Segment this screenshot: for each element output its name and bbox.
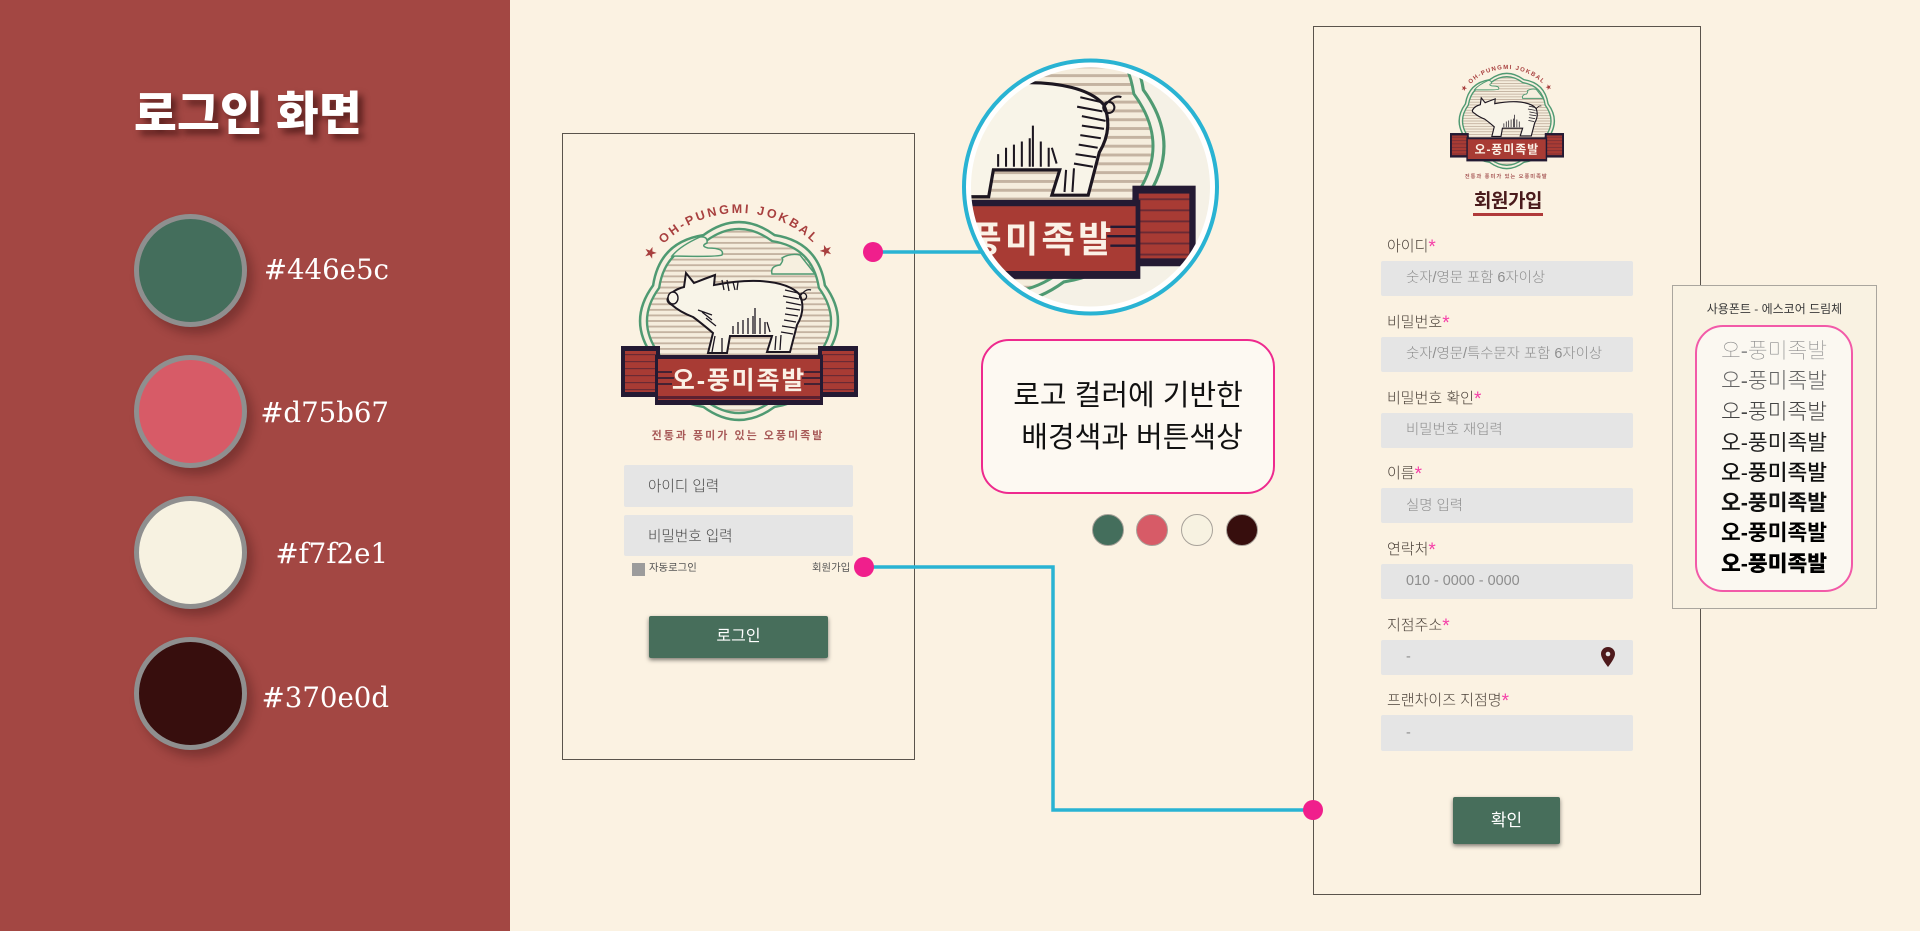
icon: location pin <box>1601 647 1615 667</box>
placeholder: contact: 010 - 0000 - 0000 <box>1406 573 1520 589</box>
mini swatch: pink <box>1136 514 1168 546</box>
colour code: cream: #f7f2e1 <box>275 537 388 570</box>
login input: id: 아이디 입력 <box>648 479 719 495</box>
input: id <box>1381 261 1633 296</box>
panel: sign up mockup <box>1313 26 1701 895</box>
logo: sign up screen: 전통과 풍미가 있는 오풍미족발 <box>1465 172 1548 180</box>
font sample: weight 5: 오-풍미족발 <box>1721 461 1827 485</box>
logo: sign up screen: 오-풍미족발 <box>1475 143 1539 157</box>
callout: logo colour note: 로고 컬러에 기반한 <box>1013 380 1243 412</box>
font sample: weight 2: 오-풍미족발 <box>1721 369 1827 393</box>
label: auto login: 자동로그인 <box>649 563 697 574</box>
placeholder: password confirm: 비밀번호 재입력 <box>1406 422 1503 438</box>
input: branch address <box>1381 640 1633 675</box>
button: confirm: 확인 <box>1491 811 1522 830</box>
form field: password: 비밀번호* <box>1387 313 1450 334</box>
button: login <box>649 616 828 658</box>
panel: colour palette sidebar <box>0 0 510 931</box>
form field: branch address: 지점주소* <box>1387 616 1450 637</box>
swatch: dark brown <box>134 637 247 750</box>
mini swatch: dark brown <box>1226 514 1258 546</box>
placeholder: password: 숫자/영문/특수문자 포함 6자이상 <box>1406 346 1602 362</box>
logo: sign up screen <box>1450 64 1564 180</box>
input: franchise name <box>1381 715 1633 751</box>
input: name <box>1381 488 1633 523</box>
font panel title: 사용폰트 - 에스코어 드림체 <box>1707 302 1842 316</box>
connector: logo to magnifier <box>863 242 985 262</box>
connector: sign up link to sign up screen <box>854 557 1323 820</box>
mini swatch: cream <box>1181 514 1213 546</box>
button: login: 로그인 <box>716 628 761 645</box>
logo: login screen: 오-풍미족발 <box>672 367 806 395</box>
form field: name: 이름* <box>1387 464 1422 485</box>
font sample: weight 1: 오-풍미족발 <box>1721 339 1827 363</box>
form field: contact: 연락처* <box>1387 540 1436 561</box>
font sample: weight 6: 오-풍미족발 <box>1721 491 1827 515</box>
button: confirm <box>1453 797 1560 844</box>
input: password <box>1381 337 1633 372</box>
colour code: dark brown: #370e0d <box>262 681 389 714</box>
heading: login screen: 로그인 화면 <box>134 88 362 140</box>
logo: login screen <box>621 204 858 442</box>
placeholder: id: 숫자/영문 포함 6자이상 <box>1406 270 1545 286</box>
swatch: green <box>134 214 247 327</box>
font sample: weight 3: 오-풍미족발 <box>1721 400 1827 424</box>
input: contact <box>1381 564 1633 599</box>
logo: login screen: ★ OH-PUNGMI JOKBAL ★ <box>645 204 831 259</box>
font sample: weight 7: 오-풍미족발 <box>1721 521 1827 545</box>
swatch: pink <box>134 355 247 468</box>
logo: sign up screen: ★ OH-PUNGMI JOKBAL ★ <box>1462 64 1551 91</box>
placeholder: branch address: - <box>1406 649 1411 665</box>
overlay: logos, connectors and magnifier <box>621 58 1615 820</box>
login input: id <box>624 465 853 507</box>
form field: id: 아이디* <box>1387 237 1436 258</box>
colour code: pink: #d75b67 <box>260 396 389 429</box>
magnifier: logo detail <box>962 58 1219 316</box>
login input: password: 비밀번호 입력 <box>648 529 733 545</box>
heading underline <box>1473 213 1543 216</box>
magnifier: logo detail: 오-풍미족발 <box>916 219 1115 260</box>
form field: password confirm: 비밀번호 확인* <box>1387 389 1481 410</box>
checkbox: auto login <box>632 563 645 576</box>
callout: logo colour note <box>981 339 1275 494</box>
callout: logo colour note: 배경색과 버튼색상 <box>1021 422 1243 454</box>
input: password confirm <box>1381 413 1633 448</box>
font weight sample box <box>1695 325 1853 592</box>
colour code: green: #446e5c <box>264 253 389 286</box>
placeholder: franchise name: - <box>1406 725 1411 741</box>
panel: font sample <box>1672 285 1877 609</box>
link: sign up: 회원가입 <box>812 563 850 574</box>
font sample: weight 8: 오-풍미족발 <box>1721 552 1827 576</box>
mini swatch: green <box>1092 514 1124 546</box>
panel: login screen mockup <box>562 133 915 760</box>
placeholder: name: 실명 입력 <box>1406 498 1463 514</box>
login input: password <box>624 515 853 556</box>
swatch: cream <box>134 496 247 609</box>
font sample: weight 4: 오-풍미족발 <box>1721 431 1827 455</box>
logo: login screen: 전통과 풍미가 있는 오풍미족발 <box>652 428 824 442</box>
heading: sign up: 회원가입 <box>1474 191 1542 212</box>
form field: franchise name: 프랜차이즈 지점명* <box>1387 691 1509 712</box>
